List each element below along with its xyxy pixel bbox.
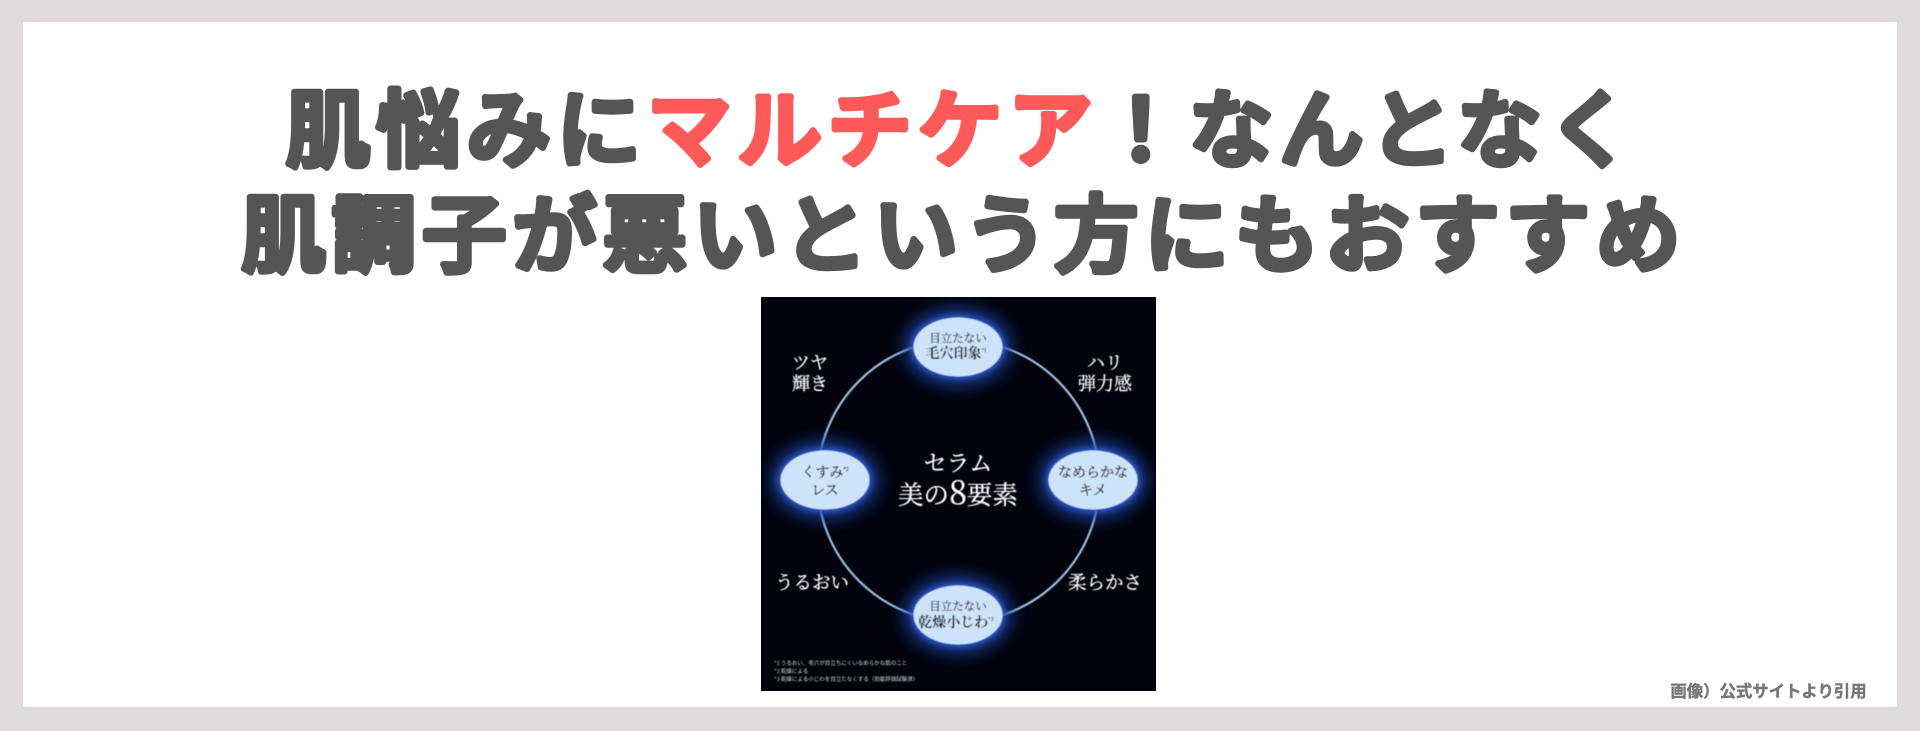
- label: shine: 輝き: [792, 370, 828, 396]
- node: smooth texture: キメ: [1079, 480, 1107, 500]
- node: pores: *1: [982, 347, 987, 354]
- node: smooth texture: [1041, 443, 1145, 517]
- label: firmness: 弾力感: [1078, 370, 1133, 396]
- center heading: セラム: [924, 445, 992, 478]
- node: pores: [906, 310, 1010, 384]
- node: dullness: *2: [843, 466, 849, 473]
- node: dullness: [773, 443, 877, 517]
- center heading: 美の8要素: [898, 468, 1018, 514]
- center heading: [898, 445, 1018, 514]
- footnotes: *3 乾燥による小じわを目立たなくする（効能評価試験済）: [774, 675, 918, 683]
- node: dry lines: 乾燥小じわ: [918, 612, 988, 632]
- node: pores: 毛穴印象: [926, 343, 982, 363]
- diagram: eight elements of beauty: [761, 297, 1156, 691]
- node: pores: 目立たない: [929, 330, 987, 346]
- footnotes: *2 乾燥による: [774, 667, 808, 675]
- label: softness: 柔らかさ: [1068, 569, 1142, 595]
- node: dry lines: *3: [988, 616, 994, 623]
- label: shine: [792, 349, 828, 396]
- label: firmness: ハリ: [1087, 349, 1123, 375]
- ring connecting the nodes: [818, 340, 1100, 622]
- image credit: 画像）公式サイトより引用: [1670, 683, 1867, 701]
- label: firmness: [1078, 349, 1133, 396]
- title: [240, 64, 1686, 290]
- footnotes: [774, 659, 918, 683]
- title line 1: 肌悩みにマルチケア！なんとなく: [286, 64, 1638, 185]
- node: dullness: くすみ: [801, 462, 843, 482]
- footnotes: *1 うるおい、毛穴が目立ちにくいなめらかな肌のこと: [774, 659, 907, 667]
- label: moisture: うるおい: [775, 569, 849, 595]
- node: dullness: レス: [811, 480, 839, 500]
- node: smooth texture: なめらかな: [1058, 462, 1128, 482]
- node: dry lines: [906, 578, 1010, 652]
- label: shine: ツヤ: [792, 349, 828, 375]
- node: dry lines: 目立たない: [929, 598, 987, 614]
- title line 2: 肌調子が悪いという方にもおすすめ: [242, 169, 1686, 290]
